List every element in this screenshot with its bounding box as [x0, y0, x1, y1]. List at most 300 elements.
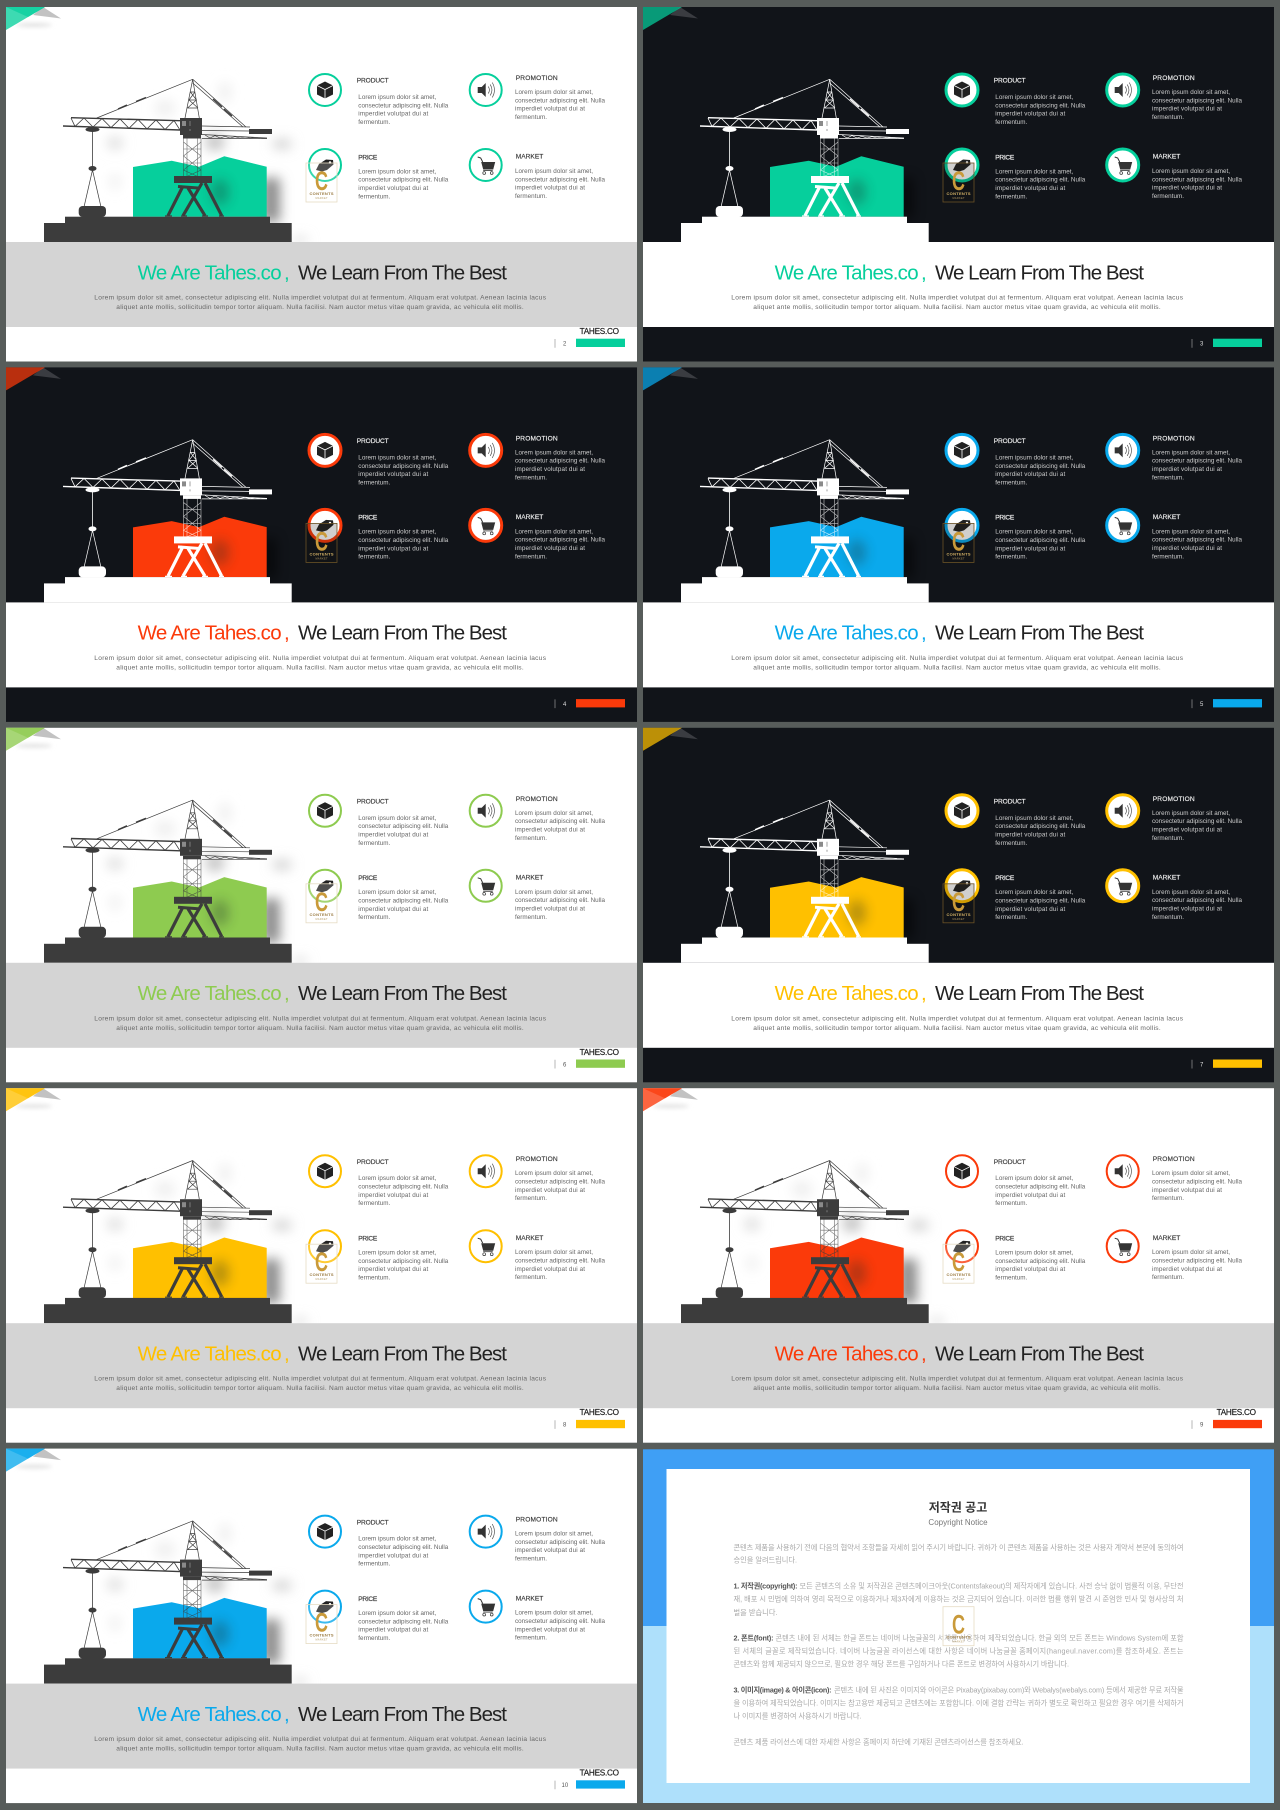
watermark logo: C [952, 166, 965, 196]
shadows [107, 1163, 308, 1324]
slide background [6, 7, 637, 362]
item: product: fermentum. [358, 840, 391, 847]
item: product: Lorem ipsum dolor sit amet, [358, 815, 437, 822]
corner ribbon [6, 367, 61, 390]
item: market: fermentum. [1152, 553, 1184, 560]
shadows [899, 899, 913, 939]
slide background [6, 728, 637, 1082]
item: market: imperdiet volutpat dui at [1152, 185, 1222, 192]
building shadow spot [211, 900, 229, 926]
panel: slide 3 teal dark [643, 7, 1274, 362]
item: product: imperdiet volutpat dui at [995, 831, 1066, 838]
band [6, 242, 637, 327]
crane [63, 79, 272, 217]
crane [700, 440, 909, 577]
corner ribbon [643, 7, 698, 30]
item: market: Lorem ipsum dolor sit amet, [1152, 1249, 1230, 1256]
band text: aliquet ante mollis, sollicitudin tempor tortor aliquam. Nulla facilisi. Nam auctor metus vitae quam gravida, ac vehicula elit mollis. [116, 1385, 524, 1392]
paragraph 2: 콘텐츠 내에 된 서체는 한글 폰트는 네이버 나눔글꼴의 서체를 사용하여 제작되었습니다. 한글 외의 모든 폰트는 Windows System에 포함 [776, 1634, 1184, 1643]
paragraph 1 [734, 1582, 1184, 1617]
panel: slide 5 blue dark [643, 367, 1274, 722]
shadows [899, 538, 913, 578]
watermark logo: MARKET [316, 1639, 328, 1642]
band text: Lorem ipsum dolor sit amet, consectetur adipiscing elit. Nulla imperdiet volutpat dui at fermentum. Aliquam erat volutpat. Aenean lacinia lacus [731, 1376, 1184, 1383]
item: price: PRICE [995, 875, 1015, 882]
stepped base [681, 577, 929, 602]
band [643, 242, 1274, 327]
item: price [946, 509, 1086, 561]
item: product: Lorem ipsum dolor sit amet, [358, 1175, 437, 1182]
item: price: PRICE [358, 1235, 378, 1242]
item: promotion: imperdiet volutpat dui at [515, 466, 585, 473]
item: promotion [1107, 434, 1242, 481]
item: price: consectetur adipiscing elit. Nulla [995, 177, 1086, 184]
watermark logo [943, 884, 974, 923]
item: promotion [470, 74, 605, 121]
band [643, 602, 1274, 687]
item: promotion: imperdiet volutpat dui at [515, 1547, 585, 1554]
item: market [470, 509, 605, 560]
item: price: Lorem ipsum dolor sit amet, [358, 1610, 437, 1617]
corner ribbon [643, 1088, 698, 1111]
item: promotion: PROMOTION [1153, 75, 1195, 82]
item: market: Lorem ipsum dolor sit amet, [515, 1610, 593, 1617]
item: price: Lorem ipsum dolor sit amet, [995, 168, 1074, 175]
band text [94, 294, 547, 311]
item: product: PRODUCT [994, 438, 1026, 445]
item: promotion: PROMOTION [516, 1156, 558, 1163]
footer: 6 [563, 1062, 567, 1068]
item: market: imperdiet volutpat dui at [515, 1266, 585, 1273]
heading: , [921, 261, 927, 284]
heading: , [284, 1342, 290, 1365]
heading: We Are Tahes.co [138, 261, 282, 284]
heading: We Learn From The Best [935, 622, 1144, 645]
item: promotion: Lorem ipsum dolor sit amet, [1152, 1170, 1230, 1177]
paragraph 1: 벌을 받습니다. [734, 1608, 778, 1617]
crane [700, 800, 909, 938]
shadows [107, 803, 308, 964]
item: price: Lorem ipsum dolor sit amet, [995, 889, 1074, 896]
item: product [309, 1155, 449, 1207]
band [6, 602, 637, 687]
item: price: PRICE [995, 515, 1015, 522]
item: market: MARKET [1153, 1235, 1180, 1242]
heading: We Learn From The Best [935, 261, 1144, 284]
item: market: fermentum. [515, 193, 547, 200]
item: market: fermentum. [1152, 914, 1184, 921]
heading: We Are Tahes.co [775, 982, 919, 1005]
item: product: imperdiet volutpat dui at [358, 111, 429, 118]
item: market: MARKET [516, 874, 543, 881]
band text: Lorem ipsum dolor sit amet, consectetur adipiscing elit. Nulla imperdiet volutpat dui at fermentum. Aliquam erat volutpat. Aenean lacinia lacus [731, 655, 1184, 662]
paragraph 3: 3. 이미지(image) & 아이콘(icon): [734, 1686, 832, 1695]
item: product: imperdiet volutpat dui at [358, 1192, 429, 1199]
item: market [1107, 1230, 1242, 1281]
item: market: imperdiet volutpat dui at [1152, 545, 1222, 552]
item: promotion: PROMOTION [516, 1517, 558, 1524]
item: promotion [470, 795, 605, 842]
item: promotion: consectetur adipiscing elit. Nulla [1152, 97, 1242, 104]
stepped base [681, 217, 929, 242]
item: price: Lorem ipsum dolor sit amet, [995, 1249, 1074, 1256]
heading [138, 982, 507, 1005]
crane [63, 800, 272, 938]
item: promotion: PROMOTION [1153, 796, 1195, 803]
item: promotion: Lorem ipsum dolor sit amet, [1152, 89, 1230, 96]
crane [63, 1521, 272, 1659]
watermark logo: C [952, 1247, 965, 1277]
item: promotion: imperdiet volutpat dui at [1152, 826, 1222, 833]
item: price: Lorem ipsum dolor sit amet, [358, 1249, 437, 1256]
band text: aliquet ante mollis, sollicitudin tempor tortor aliquam. Nulla facilisi. Nam auctor metus vitae quam gravida, ac vehicula elit mollis. [116, 664, 524, 671]
footer: 8 [563, 1423, 567, 1429]
watermark logo [306, 1605, 337, 1644]
item: promotion: consectetur adipiscing elit. Nulla [1152, 458, 1242, 465]
corner ribbon [6, 1088, 61, 1111]
item: price: Lorem ipsum dolor sit amet, [358, 168, 437, 175]
band text [94, 1736, 547, 1753]
stepped base [681, 1298, 929, 1323]
item: market: Lorem ipsum dolor sit amet, [515, 889, 593, 896]
item: product [309, 1516, 449, 1568]
item: promotion: consectetur adipiscing elit. Nulla [515, 1178, 605, 1185]
item: market: consectetur adipiscing elit. Nulla [515, 897, 605, 904]
item: promotion: imperdiet volutpat dui at [1152, 1187, 1222, 1194]
item: price: fermentum. [995, 914, 1028, 921]
watermark logo [306, 884, 337, 923]
item: promotion: Lorem ipsum dolor sit amet, [515, 1170, 593, 1177]
band text: aliquet ante mollis, sollicitudin tempor tortor aliquam. Nulla facilisi. Nam auctor metus vitae quam gravida, ac vehicula elit mollis. [753, 304, 1161, 311]
item: price [309, 1230, 449, 1282]
item: price: Lorem ipsum dolor sit amet, [358, 529, 437, 536]
item: price: Lorem ipsum dolor sit amet, [995, 529, 1074, 536]
item: promotion: fermentum. [1152, 835, 1184, 842]
paragraph 1: 재, 배포 시 민법에 의하여 영리 목적으로 이용하거나 제3자에게 이용하는 것은 금지되어 있습니다. 이러한 법률 행위 발견 시 준엄한 민사 및 형사상의 처 [734, 1595, 1184, 1604]
item: price: imperdiet volutpat dui at [995, 1266, 1066, 1273]
footer: TAHES.CO [580, 1408, 619, 1417]
item: market: imperdiet volutpat dui at [1152, 1266, 1222, 1273]
corner ribbon [6, 728, 61, 751]
item: product: consectetur adipiscing elit. Nulla [358, 102, 449, 109]
corner ribbon [6, 7, 61, 30]
item: promotion: consectetur adipiscing elit. Nulla [515, 458, 605, 465]
item: market: imperdiet volutpat dui at [1152, 905, 1222, 912]
footer: TAHES.CO [580, 1048, 619, 1057]
band [643, 963, 1274, 1048]
item: promotion [470, 1155, 605, 1202]
white sheet [666, 1469, 1250, 1783]
heading: , [284, 261, 290, 284]
item: market: consectetur adipiscing elit. Nulla [515, 1618, 605, 1625]
slide background [6, 1449, 637, 1803]
item: promotion: consectetur adipiscing elit. Nulla [1152, 818, 1242, 825]
panel: slide 2 teal light [6, 7, 637, 362]
item: promotion: fermentum. [1152, 114, 1184, 121]
heading [138, 1342, 507, 1366]
paragraph 3: 을 이용하여 제작되었습니다. 이미지는 참고용만 제공되고 콘텐츠에는 포함합니다. 이에 결합 간략는 귀하가 별도로 확인하고 필요한 경우 여기를 삭제하거 [734, 1699, 1184, 1708]
watermark logo: CONTENTS [310, 912, 334, 917]
slide background [6, 367, 637, 722]
band text: aliquet ante mollis, sollicitudin tempor tortor aliquam. Nulla facilisi. Nam auctor metus vitae quam gravida, ac vehicula elit mollis. [116, 1025, 524, 1032]
item: promotion: PROMOTION [516, 435, 558, 442]
item: market: consectetur adipiscing elit. Nulla [1152, 537, 1242, 544]
band text: Lorem ipsum dolor sit amet, consectetur adipiscing elit. Nulla imperdiet volutpat dui at fermentum. Aliquam erat volutpat. Aenean lacinia lacus [94, 655, 547, 662]
item: market: consectetur adipiscing elit. Nulla [1152, 1257, 1242, 1264]
item: price: imperdiet volutpat dui at [358, 1627, 429, 1634]
item: price: imperdiet volutpat dui at [358, 906, 429, 913]
crane [700, 79, 909, 217]
watermark logo: C [315, 526, 328, 556]
watermark logo: CONTENTS [310, 1633, 334, 1638]
item: price: PRICE [995, 1235, 1015, 1242]
building [133, 1598, 267, 1658]
item: price: fermentum. [358, 554, 391, 561]
item: price: Lorem ipsum dolor sit amet, [358, 889, 437, 896]
heading [775, 261, 1144, 284]
item: market: fermentum. [1152, 1274, 1184, 1281]
heading: , [284, 1703, 290, 1726]
paragraph 2: 콘텐츠와 함께 제공되지 않으므로, 필요한 경우 해당 폰트를 구입하거나 다른 폰트로 변경하여 사용하시기 바랍니다. [734, 1660, 1069, 1669]
building shadow spot [848, 1260, 866, 1286]
intro paragraph [734, 1543, 1184, 1565]
item: price: consectetur adipiscing elit. Nulla [358, 537, 449, 544]
item: product: Lorem ipsum dolor sit amet, [995, 815, 1074, 822]
building shadow spot [848, 539, 866, 565]
item: market: MARKET [1153, 154, 1180, 161]
paragraph 3: 콘텐츠 내에 된 사진은 이미지와 아이콘은 Pixabay(pixabay.com)와 Webalys(webalys.com) 등에서 제공한 무료 저작물 [834, 1686, 1184, 1695]
building shadow spot [211, 1621, 229, 1647]
heading: , [284, 622, 290, 645]
panel: slide 4 red dark [6, 367, 637, 722]
item: promotion: PROMOTION [516, 796, 558, 803]
watermark logo: MARKET [952, 918, 965, 921]
stepped base [44, 1658, 292, 1684]
item: product: Lorem ipsum dolor sit amet, [358, 454, 437, 461]
item: product: fermentum. [995, 1200, 1028, 1207]
item: promotion: PROMOTION [516, 75, 558, 82]
heading: We Learn From The Best [298, 1342, 507, 1365]
item: product: imperdiet volutpat dui at [358, 831, 429, 838]
band text: Lorem ipsum dolor sit amet, consectetur adipiscing elit. Nulla imperdiet volutpat dui at fermentum. Aliquam erat volutpat. Aenean lacinia lacus [731, 1015, 1184, 1022]
item: promotion: fermentum. [515, 1195, 547, 1202]
subtitle: Copyright Notice [928, 1518, 988, 1527]
item: product: fermentum. [995, 840, 1028, 847]
building [133, 156, 267, 217]
item: promotion: consectetur adipiscing elit. Nulla [1152, 1178, 1242, 1185]
shadows [107, 82, 308, 243]
intro paragraph: 승인을 알려드립니다. [734, 1556, 797, 1565]
corner ribbon [643, 367, 698, 390]
item: product: fermentum. [358, 119, 391, 126]
crane [63, 440, 272, 577]
footer: TAHES.CO [1217, 1408, 1256, 1417]
band [643, 1323, 1274, 1408]
item: market: fermentum. [515, 914, 547, 921]
intro paragraph: 콘텐츠 제품을 사용하기 전에 다음의 협약서 조항들을 자세히 읽어 주시기 바랍니다. 귀하가 이 콘텐츠 제품을 사용하는 것은 사용자 계약서 본문에 동의하여 [734, 1543, 1184, 1552]
band text: Lorem ipsum dolor sit amet, consectetur adipiscing elit. Nulla imperdiet volutpat dui at fermentum. Aliquam erat volutpat. Aenean lacinia lacus [94, 1015, 547, 1022]
item: promotion: Lorem ipsum dolor sit amet, [515, 449, 593, 456]
item: promotion: Lorem ipsum dolor sit amet, [1152, 449, 1230, 456]
stepped base [44, 1298, 292, 1323]
item: market: imperdiet volutpat dui at [515, 1626, 585, 1633]
watermark logo [306, 1244, 337, 1283]
footer [555, 1769, 625, 1789]
heading: We Are Tahes.co [138, 1342, 282, 1365]
item: product: imperdiet volutpat dui at [995, 111, 1066, 118]
watermark logo: CONTENTS [310, 551, 334, 556]
item: promotion: Lorem ipsum dolor sit amet, [515, 89, 593, 96]
shadows [899, 178, 913, 218]
item: market [1107, 870, 1242, 921]
item: product: imperdiet volutpat dui at [358, 1552, 429, 1559]
item: product [946, 795, 1086, 847]
item: product: consectetur adipiscing elit. Nulla [995, 463, 1086, 470]
item: market: fermentum. [1152, 193, 1184, 200]
shadows [107, 1524, 308, 1685]
item: promotion: consectetur adipiscing elit. Nulla [515, 97, 605, 104]
watermark logo: CONTENTS [310, 191, 334, 196]
item: price: imperdiet volutpat dui at [358, 545, 429, 552]
item: product [946, 434, 1086, 486]
item: product: imperdiet volutpat dui at [995, 1192, 1066, 1199]
item: promotion [470, 434, 605, 481]
heading [138, 1703, 507, 1726]
item: price: fermentum. [358, 193, 391, 200]
watermark logo: MARKET [952, 557, 965, 560]
footer [1192, 339, 1262, 348]
item: product: PRODUCT [357, 1159, 389, 1166]
item: promotion: fermentum. [515, 474, 547, 481]
footer [1192, 1408, 1262, 1429]
item: price: consectetur adipiscing elit. Nulla [358, 177, 449, 184]
heading [138, 261, 507, 284]
watermark logo: MARKET [316, 918, 328, 921]
footer: 5 [1200, 702, 1204, 708]
item: product: consectetur adipiscing elit. Nulla [358, 463, 449, 470]
panel: slide 8 yellow light [6, 1088, 637, 1443]
item: price [309, 149, 449, 200]
band text: aliquet ante mollis, sollicitudin tempor tortor aliquam. Nulla facilisi. Nam auctor metus vitae quam gravida, ac vehicula elit mollis. [116, 304, 524, 311]
item: promotion: consectetur adipiscing elit. Nulla [515, 1539, 605, 1546]
panel: slide 9 red light [643, 1088, 1274, 1443]
slide background [643, 728, 1274, 1082]
item: product: fermentum. [995, 119, 1028, 126]
item: market: MARKET [516, 1595, 543, 1602]
item: price: consectetur adipiscing elit. Nulla [358, 1258, 449, 1265]
item: market: imperdiet volutpat dui at [515, 905, 585, 912]
heading: We Are Tahes.co [775, 622, 919, 645]
band text: Lorem ipsum dolor sit amet, consectetur adipiscing elit. Nulla imperdiet volutpat dui at fermentum. Aliquam erat volutpat. Aenean lacinia lacus [94, 294, 547, 302]
heading: We Learn From The Best [298, 622, 507, 645]
stepped base [44, 577, 292, 602]
item: market [470, 870, 605, 921]
band text [94, 1015, 547, 1032]
band [6, 963, 637, 1048]
item: promotion [1107, 1155, 1242, 1202]
watermark logo: CONTENTS [310, 1272, 334, 1277]
item: market: fermentum. [515, 1635, 547, 1642]
item: price [946, 1230, 1086, 1282]
item: market: consectetur adipiscing elit. Nulla [1152, 176, 1242, 183]
title: 저작권 공고 [929, 1500, 987, 1515]
item: price: PRICE [358, 515, 378, 522]
item: market: consectetur adipiscing elit. Nulla [515, 1257, 605, 1264]
item: product [946, 74, 1086, 126]
watermark logo: MARKET [316, 1278, 328, 1281]
item: price [309, 870, 449, 921]
item: product [309, 74, 449, 126]
item: product: Lorem ipsum dolor sit amet, [358, 94, 437, 101]
item: market: Lorem ipsum dolor sit amet, [1152, 168, 1230, 175]
item: price: PRICE [995, 154, 1015, 161]
paragraph 3: 나 이미지를 변경하여 사용하시기 바랍니다. [734, 1712, 862, 1721]
footer [555, 327, 625, 348]
item: market: consectetur adipiscing elit. Nulla [515, 537, 605, 544]
building [770, 877, 904, 938]
item: promotion: PROMOTION [1153, 1156, 1195, 1163]
item: price: PRICE [358, 154, 378, 161]
band text: aliquet ante mollis, sollicitudin tempor tortor aliquam. Nulla facilisi. Nam auctor metus vitae quam gravida, ac vehicula elit mollis. [753, 664, 1161, 671]
paragraph 1: 1. 저작권(copyright): [734, 1582, 798, 1591]
item: price: imperdiet volutpat dui at [995, 185, 1066, 192]
item: price: consectetur adipiscing elit. Nulla [995, 537, 1086, 544]
footer [1192, 699, 1262, 708]
slide background [643, 1088, 1274, 1443]
item: market: MARKET [516, 514, 543, 521]
item: product [309, 434, 449, 486]
heading: , [921, 622, 927, 645]
footer: TAHES.CO [580, 1769, 619, 1778]
watermark logo: C [315, 1608, 328, 1638]
item: market: MARKET [516, 154, 543, 161]
building [133, 877, 267, 938]
band text [94, 655, 547, 671]
heading: We Are Tahes.co [775, 261, 919, 284]
item: product: fermentum. [995, 479, 1028, 486]
watermark logo [943, 1244, 974, 1283]
item: product: Lorem ipsum dolor sit amet, [995, 94, 1074, 101]
building [133, 1238, 267, 1298]
item: market: Lorem ipsum dolor sit amet, [515, 1249, 593, 1256]
item: price: PRICE [358, 875, 378, 882]
item: product: PRODUCT [994, 798, 1026, 805]
item: market: MARKET [1153, 514, 1180, 521]
item: price: fermentum. [358, 914, 391, 921]
heading: We Are Tahes.co [138, 982, 282, 1005]
item: market: fermentum. [515, 1274, 547, 1281]
item: price [309, 509, 449, 561]
footer [555, 699, 625, 708]
footer: 9 [1200, 1423, 1204, 1429]
watermark logo: CONTENTS [946, 551, 971, 556]
band text [731, 1376, 1184, 1392]
heading: , [921, 982, 927, 1005]
item: product: consectetur adipiscing elit. Nulla [358, 1184, 449, 1191]
paragraph 2: 2. 폰트(font): [734, 1634, 774, 1643]
footer [555, 1048, 625, 1068]
slide background [6, 1088, 637, 1443]
item: promotion: imperdiet volutpat dui at [515, 106, 585, 113]
item: promotion [1107, 74, 1242, 121]
item: product: PRODUCT [994, 78, 1026, 85]
corner ribbon [6, 1449, 61, 1472]
heading: We Learn From The Best [935, 1342, 1144, 1365]
footer: 10 [562, 1783, 569, 1789]
item: market [470, 149, 605, 200]
watermark logo: C [952, 887, 965, 917]
band text: Lorem ipsum dolor sit amet, consectetur adipiscing elit. Nulla imperdiet volutpat dui at fermentum. Aliquam erat volutpat. Aenean lacinia lacus [94, 1736, 547, 1743]
